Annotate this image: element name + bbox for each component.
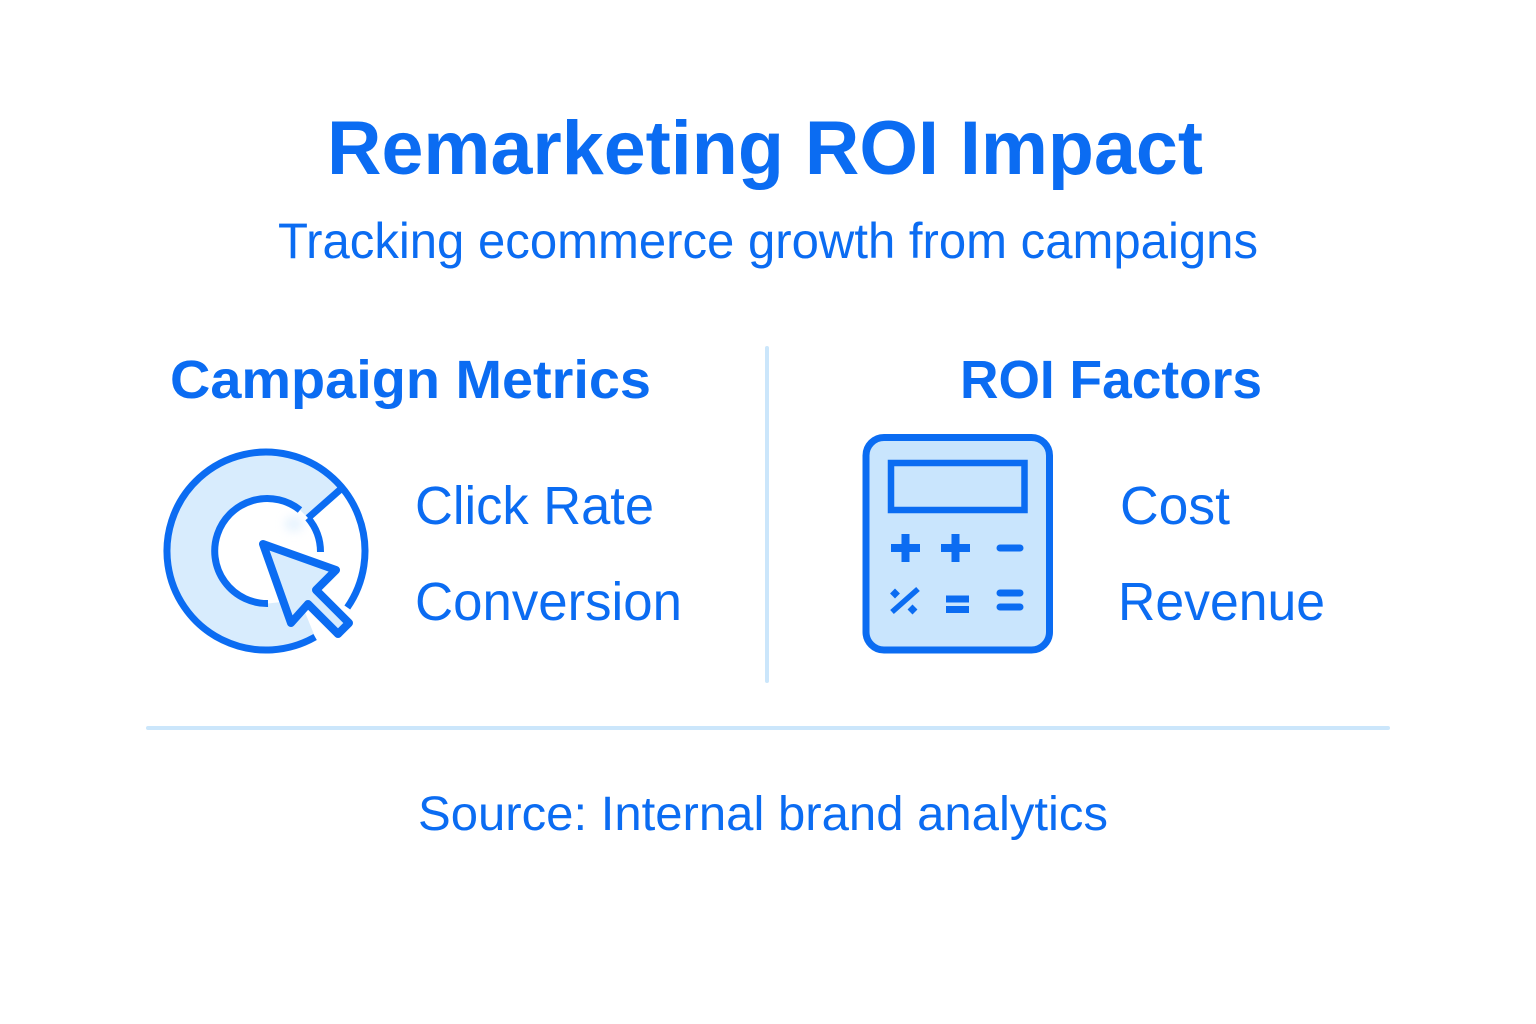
vertical divider bbox=[765, 346, 769, 683]
icon: target with cursor bbox=[167, 452, 365, 650]
source note: Source: Internal brand analytics bbox=[418, 788, 1108, 841]
label: revenue: Revenue bbox=[1118, 572, 1325, 632]
horizontal divider bbox=[146, 726, 1390, 730]
label: conversion: Conversion bbox=[415, 572, 682, 632]
subtitle: Tracking ecommerce growth from campaigns bbox=[278, 213, 1258, 269]
label: click rate: Click Rate bbox=[415, 476, 654, 536]
heading: campaign metrics: Campaign Metrics bbox=[170, 350, 651, 410]
label: cost: Cost bbox=[1120, 476, 1230, 536]
panel: campaign metrics bbox=[167, 350, 682, 650]
panel: ROI factors bbox=[866, 350, 1325, 650]
icon: calculator bbox=[866, 438, 1050, 650]
heading: ROI factors: ROI Factors bbox=[960, 350, 1262, 410]
title: Remarketing ROI Impact bbox=[327, 106, 1203, 191]
